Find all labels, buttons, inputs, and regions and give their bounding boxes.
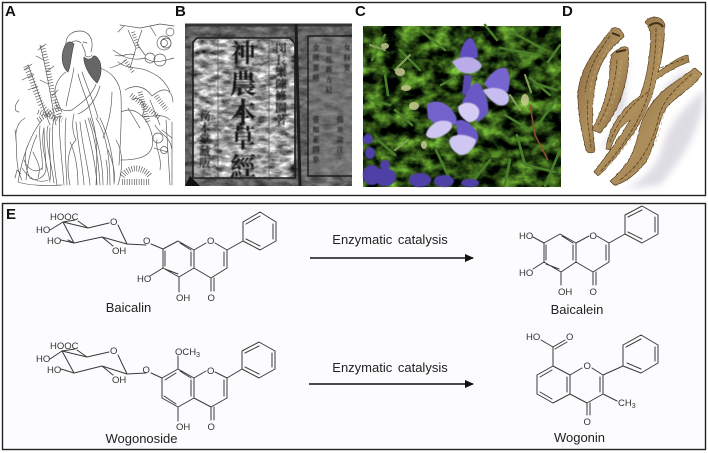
label A: A: [5, 3, 16, 20]
molecule: Wogonoside: 3: [196, 352, 200, 359]
molecule: Baicalin: HO: [137, 274, 151, 285]
right page text: 素: [312, 135, 320, 144]
bark texture: [585, 23, 696, 180]
molecule: Wogonoside: HO: [47, 365, 61, 376]
right page text: 靈: [312, 115, 320, 124]
right page text: [312, 43, 352, 164]
book title: 本: [230, 98, 256, 128]
panel B: old book cover photograph: [175, 3, 352, 186]
herbs held in hands: [22, 44, 62, 180]
book title: 草: [230, 125, 256, 153]
molecule: Baicalin: HOOC: [50, 212, 79, 223]
side inscriptions: 長: [275, 54, 287, 67]
right page text: 砭: [326, 85, 332, 94]
right page text: 要: [344, 63, 352, 72]
right page text: 金: [312, 43, 320, 52]
root 1: [578, 28, 624, 153]
left cover frame: [185, 24, 295, 186]
right page text: 傷: [336, 115, 344, 124]
molecule: Baicalin: O: [143, 236, 150, 247]
side inscriptions: 堂: [199, 132, 211, 146]
right page text: 科: [344, 53, 350, 62]
dried roots: [578, 17, 702, 185]
right page text: 岳: [326, 55, 332, 64]
side inscriptions: 務: [199, 109, 211, 123]
molecule: Wogonoside: OCH: [175, 347, 196, 358]
molecule: Baicalin: [36, 212, 276, 315]
right page text: 論: [336, 135, 344, 144]
right page text: 略: [312, 73, 320, 82]
molecule: Baicalein: OH: [558, 287, 572, 298]
molecule: Wogonin: HO: [526, 332, 540, 343]
right page text: 新: [326, 65, 332, 74]
molecule: Wogonin: [526, 332, 658, 445]
molecule: Baicalin: O: [208, 293, 215, 304]
root 2: [592, 47, 629, 133]
side inscriptions: 藏: [199, 144, 211, 158]
right page text: 方: [326, 75, 332, 84]
stems: [466, 75, 468, 95]
side inscriptions: 園: [275, 101, 287, 115]
right page text: 女: [344, 43, 352, 52]
side inscriptions: 修: [275, 89, 287, 103]
molecule: Wogonin: CH: [618, 398, 632, 409]
molecule: Wogonoside: [36, 341, 275, 446]
label C: C: [355, 3, 366, 20]
molecule: Baicalin: O: [110, 217, 117, 228]
molecule: Baicalein: O: [590, 231, 597, 242]
main flowers: [426, 38, 510, 155]
book title: 神: [230, 40, 256, 68]
right page: [295, 24, 352, 186]
right page text: 集: [312, 155, 320, 164]
molecule: Wogonin: O: [584, 361, 591, 372]
molecule: Wogonoside: HO: [36, 354, 50, 365]
label E: E: [6, 206, 16, 223]
molecule: Wogonoside: O: [110, 346, 117, 357]
name: Baicalin: Baicalin: [106, 300, 151, 315]
molecule: Baicalin: OH: [176, 293, 190, 304]
centre flower: [462, 83, 488, 122]
right page text: 寒: [336, 125, 344, 134]
right page text: 樞: [312, 125, 320, 134]
right page text: 注: [336, 145, 344, 154]
side inscriptions: [199, 41, 287, 170]
right flower: [484, 68, 510, 92]
right page text: 景: [326, 45, 334, 54]
figure: Shennong: [15, 31, 122, 186]
book title: [230, 40, 256, 182]
panel E: enzymatic conversion schemes: [6, 206, 658, 446]
lower flower: [456, 120, 478, 146]
label D: D: [562, 3, 573, 20]
side inscriptions: 樂: [275, 65, 287, 79]
molecule: Wogonin: 3: [632, 403, 636, 410]
garden background: [363, 25, 561, 187]
molecule: Baicalin: HO: [36, 225, 50, 236]
molecule: Baicalin: O: [207, 236, 214, 247]
panel: top images frame: [2, 2, 706, 196]
panel: reaction frame E: [2, 204, 706, 450]
molecule: Baicalin: HO: [47, 236, 61, 247]
right page text: 匱: [312, 53, 320, 62]
molecule: Baicalein: HO: [519, 268, 533, 279]
panel D: dried roots photograph: [562, 3, 704, 190]
book title: 經: [230, 153, 256, 182]
root 4: [610, 68, 702, 185]
side inscriptions: 閔: [275, 41, 287, 55]
reaction arrow 1: Enzymatic catalysis: [332, 232, 448, 247]
root 3 with branches: [594, 17, 689, 176]
molecule: Wogonoside: OH: [176, 422, 190, 433]
side inscriptions: 版: [199, 156, 211, 170]
panel C: flower photograph: [355, 3, 561, 187]
molecule: Baicalein: HO: [519, 231, 533, 242]
molecule: Wogonoside: O: [208, 422, 215, 433]
top flower: [460, 38, 478, 58]
reaction arrow 2: Enzymatic catalysis: [332, 360, 448, 375]
molecule: Wogonin: O: [584, 417, 591, 428]
right page text: 問: [312, 145, 320, 154]
side inscriptions: 陳: [275, 77, 287, 91]
root shadows: [600, 60, 704, 190]
molecule: Wogonoside: HOOC: [50, 341, 79, 352]
molecule: Wogonoside: O: [142, 365, 150, 376]
molecule: Baicalein: [519, 206, 658, 317]
book title: 農: [230, 70, 256, 100]
name: Wogonoside: Wogonoside: [105, 431, 178, 446]
book photograph: [185, 24, 352, 186]
right page text: 要: [312, 63, 320, 72]
flowers and foliage background: [110, 24, 174, 185]
side inscriptions: 本: [199, 121, 211, 135]
molecule: Baicalein: O: [590, 287, 597, 298]
molecule: Wogonin: O: [566, 332, 573, 343]
side inscriptions: 著: [275, 113, 287, 127]
lower purple flower cluster: [363, 134, 479, 187]
molecule: Wogonoside: OH: [112, 375, 126, 386]
label B: B: [175, 3, 186, 20]
molecule: Wogonoside: O: [207, 366, 214, 377]
name: Baicalein: Baicalein: [551, 302, 603, 317]
left flower: [427, 102, 457, 128]
panel A: line drawing of Shennong with herbs: [5, 3, 174, 186]
molecule: Baicalin: OH: [112, 246, 126, 257]
name: Wogonin: Wogonin: [554, 430, 605, 445]
